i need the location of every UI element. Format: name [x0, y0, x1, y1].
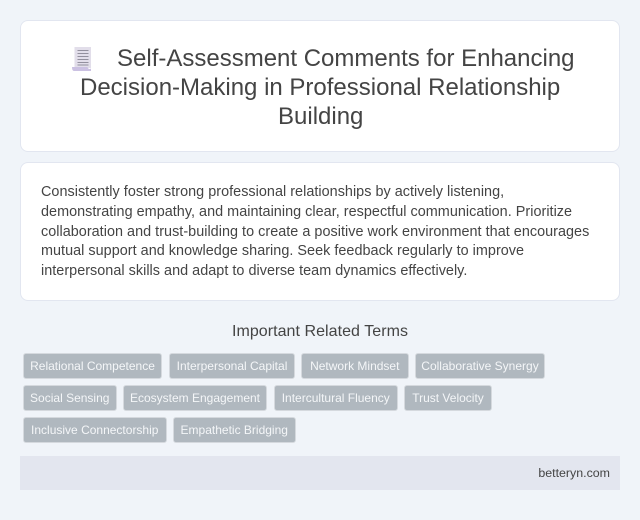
tag: Empathetic Bridging	[181, 423, 288, 437]
tag	[23, 417, 166, 443]
tag: Social Sensing	[30, 391, 109, 405]
description text: collaboration and trust-building to create a positive work environment that encourages	[41, 224, 589, 240]
tag	[173, 417, 296, 443]
description text: demonstrating empathy, and maintaining clear, respectful communication. Prioritize	[41, 204, 572, 220]
description text: interpersonal skills and adapt to diverse team dynamics effectively.	[41, 263, 467, 279]
tag list	[23, 353, 545, 443]
tag: Network Mindset	[310, 359, 399, 373]
description text	[41, 184, 589, 279]
tag	[301, 353, 408, 379]
description text: mutual support and knowledge sharing. Seek feedback regularly to improve	[41, 243, 524, 259]
tag	[23, 385, 116, 411]
tag: Intercultural Fluency	[282, 391, 390, 405]
tag: Collaborative Synergy	[421, 359, 539, 373]
heading: related terms: Important Related Terms	[232, 323, 408, 340]
description text: Consistently foster strong professional relationships by actively listening,	[41, 184, 504, 200]
footer bar	[20, 456, 620, 490]
footer text: betteryn.com	[538, 466, 610, 480]
tag	[274, 385, 398, 411]
tag: Interpersonal Capital	[177, 359, 287, 373]
title: Self-Assessment Comments for Enhancing	[117, 45, 575, 72]
tag	[415, 353, 545, 379]
tag	[404, 385, 492, 411]
tag: Relational Competence	[30, 359, 155, 373]
tag	[169, 353, 295, 379]
title	[80, 45, 575, 130]
title: Building	[278, 103, 363, 130]
icon: receipt scroll	[72, 47, 91, 71]
tag: Trust Velocity	[412, 391, 484, 405]
tag	[123, 385, 267, 411]
tag	[23, 353, 162, 379]
tag: Inclusive Connectorship	[31, 423, 158, 437]
tag: Ecosystem Engagement	[130, 391, 260, 405]
panel: description card	[20, 162, 620, 301]
title: Decision-Making in Professional Relationship	[80, 74, 560, 101]
panel: title card	[20, 20, 620, 152]
